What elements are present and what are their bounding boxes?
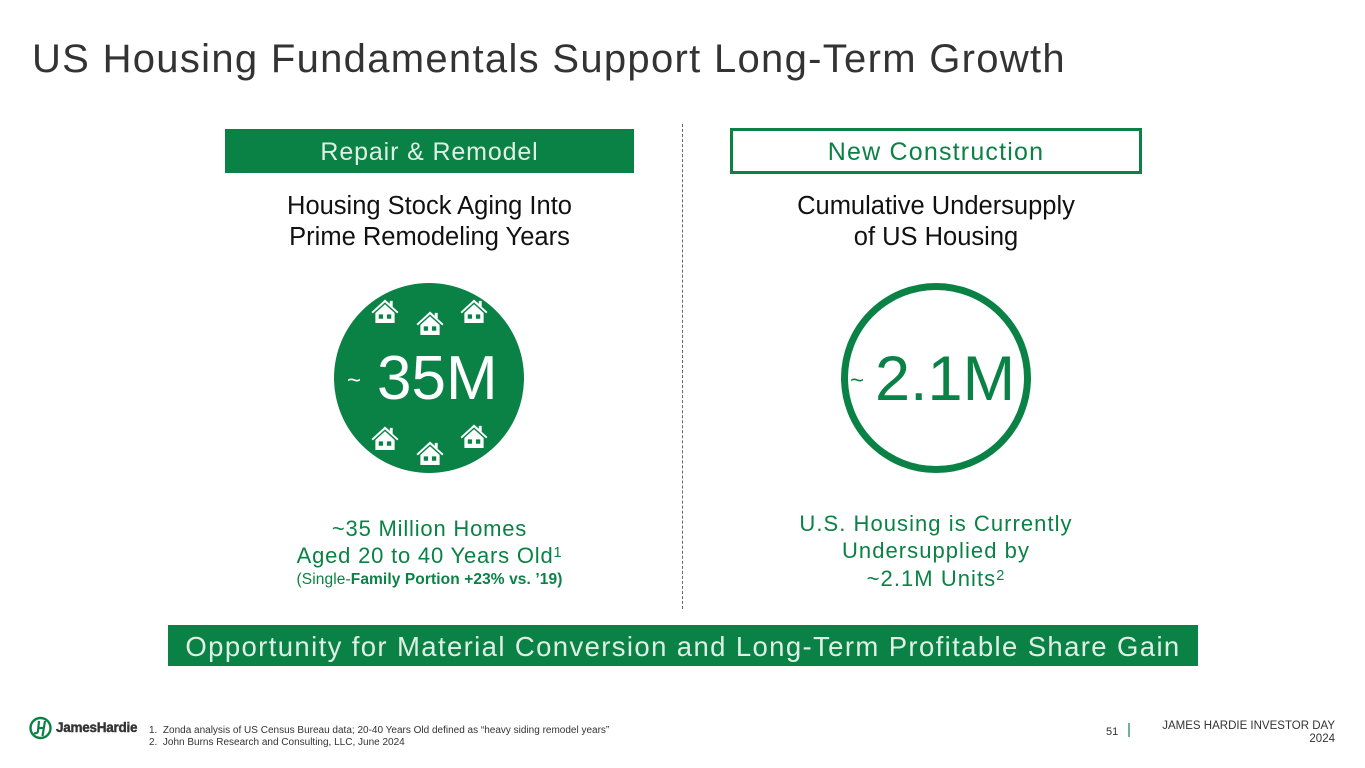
- title: US Housing Fundamentals Support Long-Term Growth: [32, 37, 1066, 81]
- banner: opportunity: Opportunity for Material Conversion and Long-Term Profitable Share Gain: [185, 631, 1181, 662]
- header: new construction: New Construction: [828, 138, 1044, 166]
- header: new construction: [730, 128, 1142, 174]
- icons: houses: [372, 300, 488, 465]
- description: 35 million homes: Aged 20 to 40 Years Old1: [297, 543, 562, 568]
- footnotes: [149, 725, 609, 748]
- description: undersupplied: Undersupplied by: [842, 538, 1030, 563]
- logo wordmark: JamesHardie: [56, 720, 137, 735]
- stat value: 35M: [377, 344, 498, 413]
- subheading: housing stock: Prime Remodeling Years: [289, 223, 570, 251]
- center divider: [682, 124, 683, 609]
- subheading: housing stock: [287, 192, 572, 251]
- subheading: undersupply: Cumulative Undersupply: [797, 192, 1075, 220]
- header: repair and remodel: [225, 129, 634, 173]
- description: 35 million homes: ~35 Million Homes: [332, 516, 527, 541]
- description: undersupplied: U.S. Housing is Currently: [799, 511, 1073, 536]
- stat value: 2.1M: [875, 344, 1015, 414]
- stat circle: 35M: [334, 283, 524, 473]
- subheading: undersupply: of US Housing: [854, 223, 1018, 251]
- subheading: undersupply: [797, 192, 1075, 251]
- panel: repair and remodel: [225, 129, 634, 588]
- description: 35 million homes: [296, 516, 562, 588]
- footer label: 2024: [1309, 733, 1335, 745]
- stat tilde: ~: [850, 367, 864, 394]
- footnotes: 2. John Burns Research and Consulting, LLC, June 2024: [149, 737, 405, 748]
- logo mark: [29, 716, 52, 740]
- description: 35 million homes: (Single-Family Portion +23% vs. ’19): [297, 571, 562, 588]
- footer separator: [1128, 723, 1130, 737]
- panel: new construction: [730, 128, 1142, 591]
- header: repair and remodel: Repair & Remodel: [320, 138, 539, 166]
- stat tilde: ~: [347, 367, 361, 394]
- footer label: JAMES HARDIE INVESTOR DAY: [1162, 720, 1335, 732]
- footnotes: 1. Zonda analysis of US Census Bureau data; 20-40 Years Old defined as “heavy siding remodel years”: [149, 725, 609, 736]
- logo: James Hardie: [29, 716, 138, 740]
- description: undersupplied: ~2.1M Units2: [867, 566, 1005, 591]
- page number: 51: [1106, 726, 1118, 738]
- stat circle: 2.1M: [841, 283, 1031, 473]
- description: undersupplied: [799, 511, 1073, 591]
- subheading: housing stock: Housing Stock Aging Into: [287, 192, 572, 220]
- footer label: [1162, 720, 1335, 745]
